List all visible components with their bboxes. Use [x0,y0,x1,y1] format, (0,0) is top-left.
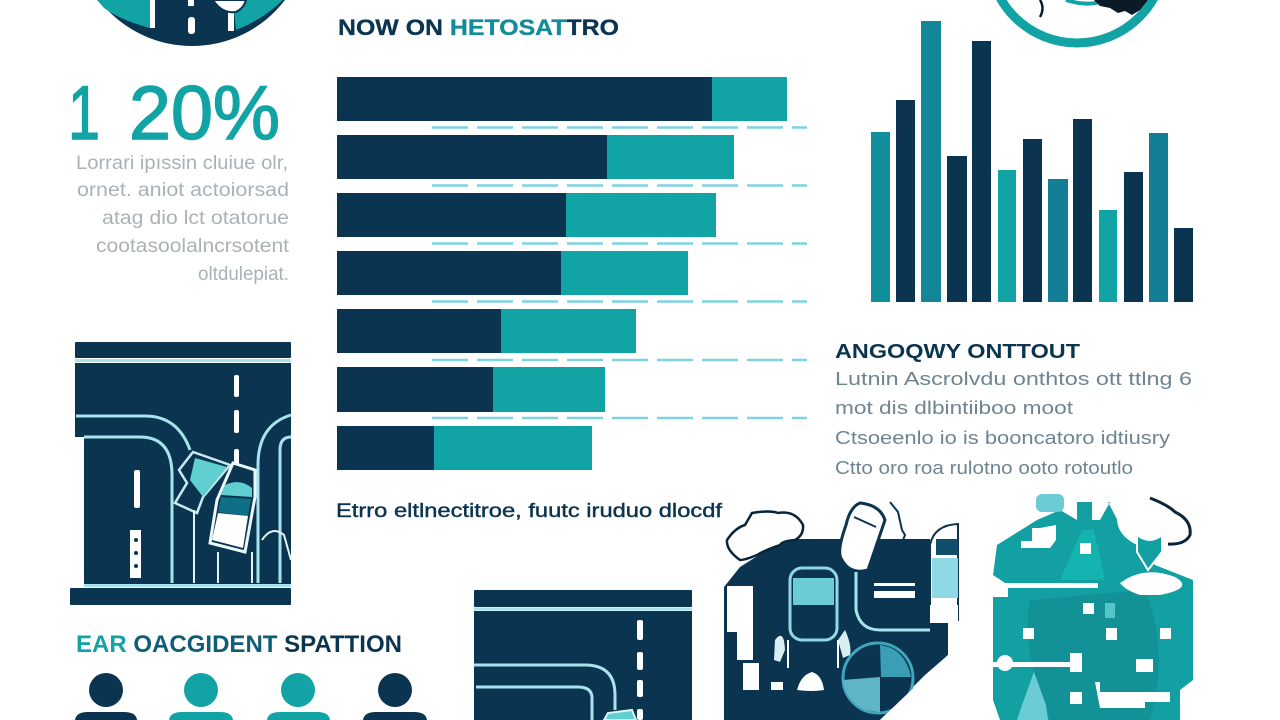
icon: white crashed car [194,463,291,583]
text block: stat description: ornet. aniot actoiorsad [77,180,289,201]
icon: person 4 [363,673,427,720]
illustration: city traffic scene [724,502,960,720]
icon: person 3 [267,673,330,720]
bar row 2 [337,135,734,179]
text block: right column body: Ctto oro roa rulotno ooto rotoutlo [835,458,1133,478]
bar row 7 [337,426,592,470]
road markings [727,583,915,691]
text block: stat description: atag dio lct otatorue [102,208,289,229]
stat: large percentage: 20% [129,71,280,156]
text block: stat description [76,153,290,285]
icon: car top [604,710,636,720]
icon: top-right ringed circle [989,0,1165,43]
text block: right column body [835,369,1192,478]
bar row 6 [337,367,605,412]
heading: accident station: EAR OACGIDENT SPATTION [76,631,402,658]
illustration: lower road panel [474,590,692,720]
icon: teal crashed car [175,452,230,513]
text block: right column body: mot dis dlbintiiboo moot [835,398,1073,418]
icon: cloud with shield [1117,498,1190,570]
vertical bar chart [871,21,1193,302]
stat: large percentage: 1 [68,71,100,156]
icon: cloud [727,512,803,560]
heading: bar chart title: NOW ON HETOSAT TRO [338,15,619,40]
icon: person 2 [169,673,233,720]
caption under bar chart: Etrro eltlnectitroe, fuutc iruduo dlocdf [336,501,723,522]
icon: teal globe [843,643,913,713]
heading: right text column: ANGOQWY ONTTOUT [835,341,1080,363]
bar row 1 [337,77,787,121]
icon: right vehicle [930,524,958,623]
stacked horizontal bar chart [337,77,807,470]
icon row: people [75,673,427,720]
icon: top-left road circle [75,0,309,46]
icon: blue car [774,568,850,668]
illustration: teal city map [992,494,1193,720]
bar row 5 [337,309,636,353]
text block: right column body: Ctsoeenlo io is booncatoro idtiusry [835,428,1170,448]
illustration: road crash panel [70,342,291,605]
text block: stat description: oltdulepiat. [198,264,289,285]
icon: person 1 [75,673,137,720]
bar row 4 [337,251,688,295]
text block: stat description: cootasoolalncrsotent [96,236,290,257]
text block: stat description: Lorrari ipıssin cluiue olr, [76,153,288,174]
text block: right column body: Lutnin Ascrolvdu onthtos ott ttlng 6 [835,369,1192,389]
bar row 3 [337,193,716,237]
icon: white car outline [840,502,905,572]
